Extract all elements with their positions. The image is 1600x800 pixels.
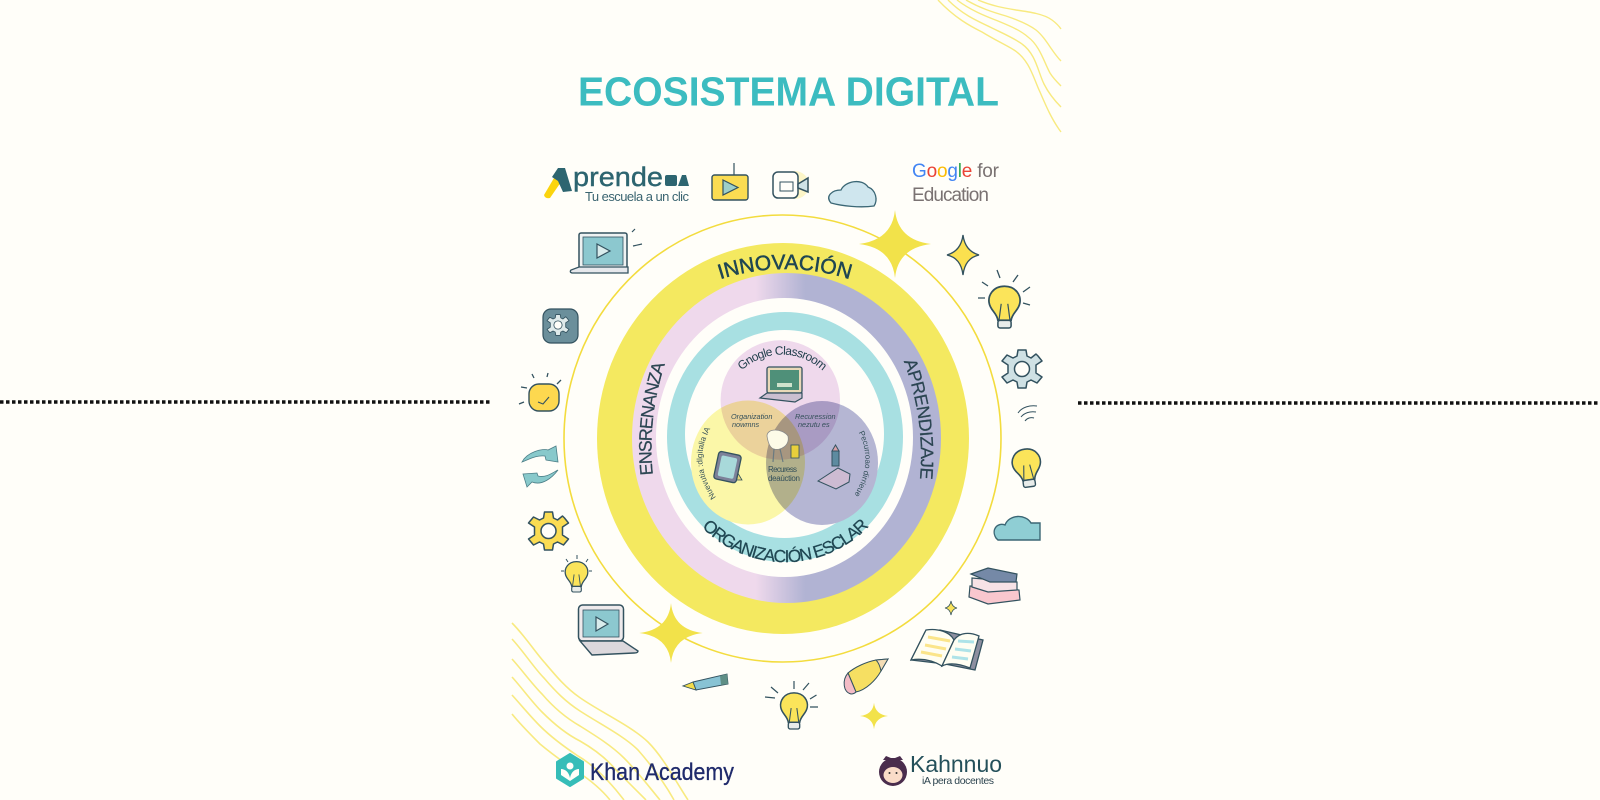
icon: bulb right (1010, 447, 1044, 489)
sparkle top (859, 210, 931, 278)
outer thin circle (564, 215, 1001, 662)
logo: Google for Education: Google for (912, 161, 1000, 182)
ring label: ENSRENANZA: ENSRENANZA (638, 364, 665, 474)
logo: Kahnnuo: iA pera docentes (922, 775, 994, 787)
venn circles (691, 340, 878, 525)
icon: video screen (712, 163, 748, 200)
logo: Google for Education: Education (912, 185, 989, 206)
sparkle bottom left (639, 603, 703, 663)
icon: center figure (767, 430, 799, 462)
logo: Aprende (544, 162, 690, 204)
icon: classroom laptop (760, 367, 802, 402)
wave decoration top right (938, 0, 1061, 132)
ring: inner cream (685, 330, 884, 538)
ring: organización teal (667, 312, 903, 562)
venn label: organization: nowmns (732, 420, 760, 429)
icon: laptop bottom left (578, 605, 638, 655)
icon: open book (911, 629, 983, 670)
icon: pen (683, 674, 728, 690)
venn label: recursos: Recuression (795, 412, 836, 421)
venn label: recursos deducción: deaùction (768, 474, 800, 483)
venn label: recursos deducción: Recuress (768, 465, 797, 474)
icon: laptop top left (570, 229, 642, 273)
icon: idea face (519, 373, 561, 411)
icon: video camera (773, 171, 809, 199)
venn label: left arc: Nuevutia :dlgitalia IA (696, 428, 716, 500)
sparkle small (945, 601, 957, 615)
icon: cloud right (994, 516, 1040, 540)
ring label: APRENDIZAJE: APRENDIZAJE (904, 361, 934, 479)
venn label: organization: Organization (731, 412, 772, 421)
logo: Khan Academy (557, 754, 735, 786)
dotted line left (0, 400, 491, 404)
icon: settings tile (543, 309, 578, 343)
ring: enseñanza and aprendizaje (632, 273, 941, 603)
ring label: ORGANIZACIÓN ESCLAR: ORGANIZACIÓN ESCLAR (704, 520, 869, 562)
icon: tablet (713, 451, 742, 483)
dotted line right (1078, 401, 1600, 405)
title: ECOSISTEMA DIGITAL (578, 68, 999, 114)
icon: cloud top (829, 182, 876, 207)
icon: pencil (844, 659, 888, 694)
icon: yellow gear (528, 512, 568, 550)
venn label: right arc: Pecurroao dirrieue (855, 430, 870, 496)
icon: book stack (969, 568, 1020, 604)
logo: Kahnnuo (879, 751, 1002, 787)
logo: Aprende: prende (573, 162, 663, 192)
icon: books and tower (818, 445, 850, 489)
logo: Google for Education (912, 161, 1000, 206)
icon: gear right (1002, 350, 1042, 388)
sparkle outlined top right (947, 235, 979, 275)
icon: wifi (1018, 406, 1037, 421)
icon: bottom bulb (765, 681, 818, 729)
sparkle bottom (860, 703, 888, 729)
ring: innovación yellow (597, 243, 969, 634)
venn diagram (691, 340, 878, 525)
ring: cream gap (656, 298, 913, 577)
ring label: INNOVACIÓN: INNOVACIÓN (718, 254, 852, 279)
venn circle: Google Classroom (721, 340, 840, 460)
icon: sync arrows (522, 446, 558, 487)
logo: Khan Academy: Khan Academy (590, 759, 735, 786)
logo: Kahnnuo: Kahnnuo (910, 751, 1002, 777)
wave decoration bottom left (512, 623, 688, 800)
venn circle: left yellow (691, 400, 805, 524)
icon: bulb top right (978, 270, 1030, 328)
venn circle: right blue (766, 401, 878, 525)
venn label: recursos: nezutu es (798, 420, 830, 429)
venn label: Google Classroom: Gnogle Classroom (738, 346, 826, 370)
logo: Aprende: Tu escuela a un clic (585, 189, 690, 204)
icon: small bulb (561, 555, 592, 592)
